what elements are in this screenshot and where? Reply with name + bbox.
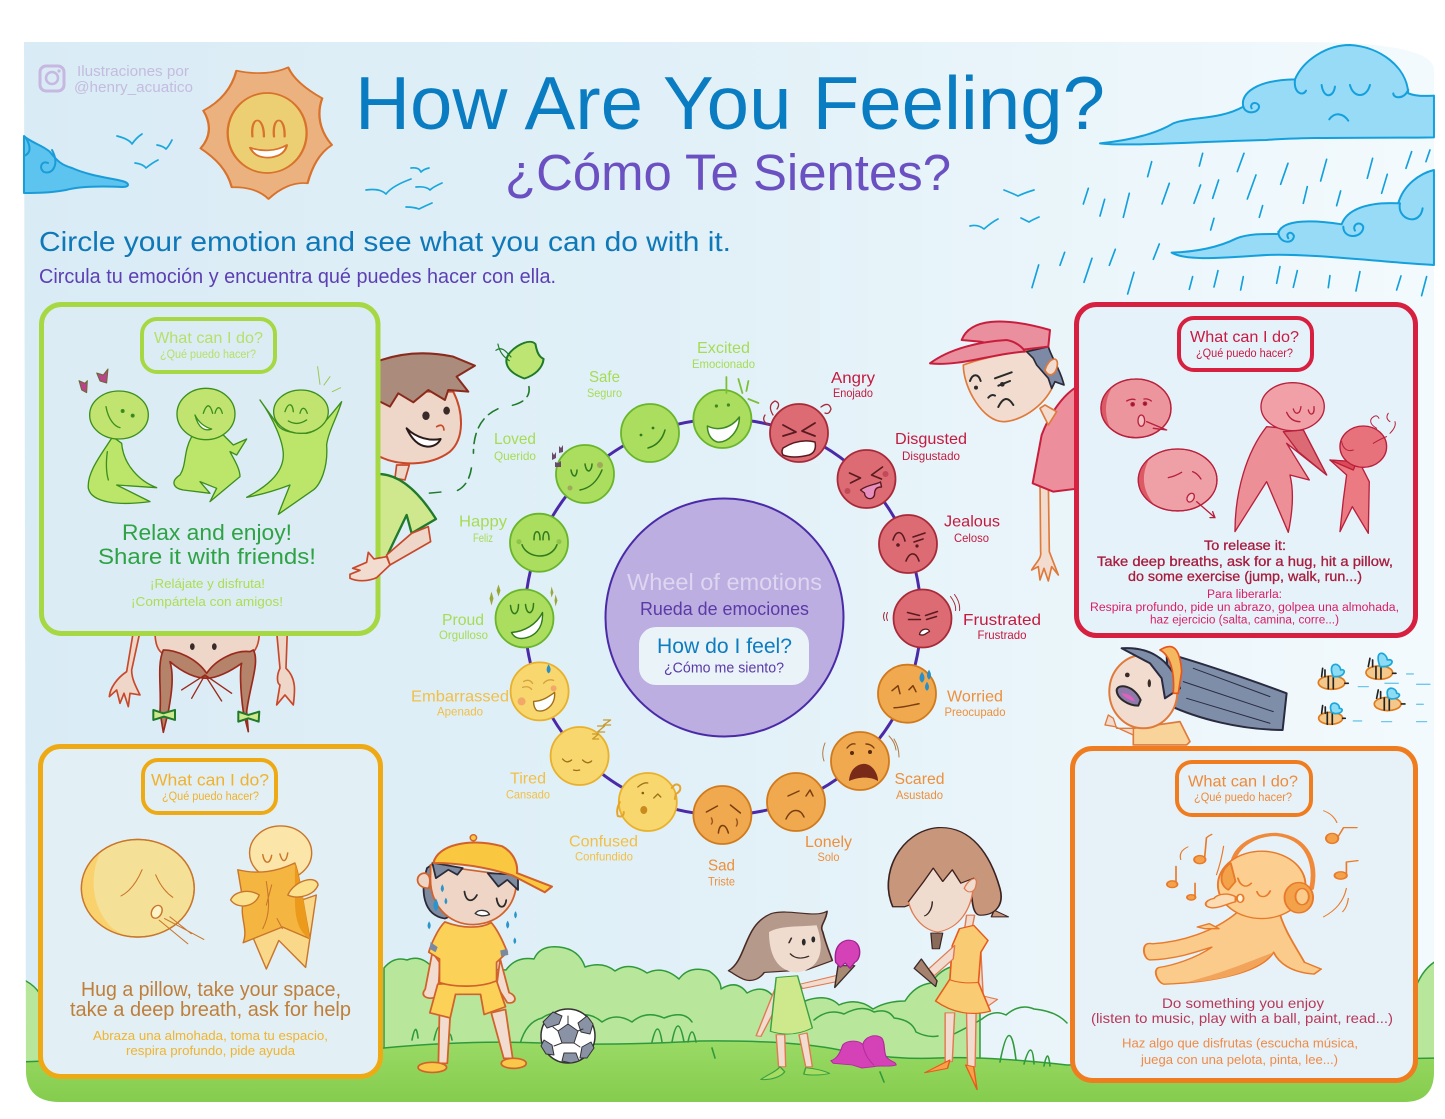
character: upside-down girl under green panel [109, 632, 295, 732]
panel: green what can I do: ¡Relájate y disfruta! [150, 576, 265, 591]
character: crying boy with yellow cap [418, 835, 552, 1072]
wheel ring [525, 419, 921, 815]
birds [117, 134, 1039, 229]
panel: red what can I do: To release it: [1204, 538, 1286, 553]
button: what can I do: ¿Qué puedo hacer? [160, 349, 256, 361]
character: grumpy boy with red cap [930, 322, 1080, 581]
emotion label: Happy: Feliz [473, 531, 493, 545]
emotion label: Worried: Preocupado [944, 705, 1006, 719]
panel: yellow what can I do: respira profundo, pide ayuda [126, 1043, 296, 1058]
cloud lower right [1172, 170, 1434, 265]
wheel centre: Wheel of emotions [627, 569, 822, 595]
button: what can I do: ¿Qué puedo hacer? [1194, 792, 1292, 804]
emotion face: Disgusted [838, 450, 896, 508]
emotion label: Angry [831, 370, 875, 400]
instagram credit: Ilustraciones por [77, 63, 189, 80]
emotion label: Proud: Proud [442, 612, 484, 629]
character: girl with ice cream [729, 911, 860, 1080]
pill: how do I feel [639, 627, 809, 685]
emotion label: Excited: Excited [697, 340, 750, 357]
emotion label: Worried [944, 688, 1006, 719]
emotion label: Loved [494, 431, 536, 463]
character: screaming girl with blowing hair [1105, 647, 1287, 745]
emotion label: Happy: Happy [459, 514, 507, 530]
icon: butterfly and dashed flight path [429, 342, 544, 493]
panel: orange what can I do: (listen to music, play with a ball, paint, read...) [1091, 1010, 1393, 1026]
button: what can I do [143, 760, 276, 813]
emotion label: Safe: Seguro [587, 386, 622, 400]
icon: smiling sun [201, 67, 332, 199]
emotion label: Tired [506, 770, 550, 802]
emotion face: Excited [693, 377, 758, 448]
panel: green what can I do [42, 304, 378, 634]
meadow: bushes and grass [20, 947, 1440, 1110]
illustration: deep breaths and hug [1087, 375, 1395, 533]
cloud left [24, 136, 128, 193]
panel: red what can I do: Respira profundo, pide un abrazo, golpea una almohada, [1090, 602, 1399, 614]
emotion label: Angry: Enojado [833, 386, 873, 400]
button: what can I do: ¿Qué puedo hacer? [162, 791, 259, 803]
emotion label: Lonely: Lonely [805, 834, 852, 851]
emotion face: Happy [510, 514, 568, 572]
emotion label: Proud [439, 612, 488, 642]
title: How Are You Feeling? [355, 61, 1105, 145]
emotion label: Confused: Confused [569, 834, 638, 850]
emotion face: Scared [823, 732, 899, 790]
icon: soccer ball [541, 1009, 595, 1063]
emotion face: Loved [552, 445, 614, 503]
emotion label: Frustrated [963, 612, 1041, 642]
emotion label: Proud: Orgulloso [439, 628, 488, 642]
button: what can I do: What can I do? [1190, 329, 1299, 346]
icon: bees [1318, 653, 1430, 724]
emotion label: Happy [459, 514, 507, 545]
emotion label: Jealous [944, 514, 1000, 545]
wheel centre: Rueda de emociones [640, 599, 809, 619]
panel: red what can I do: Take deep breaths, ask for a hug, hit a pillow, [1097, 554, 1393, 569]
emotion face: Jealous [879, 515, 937, 573]
cloud top right with sad face [1100, 45, 1434, 144]
rain [1032, 150, 1430, 296]
emotion face: Sad [693, 786, 751, 844]
emotion label: Loved: Loved [494, 431, 536, 448]
emotion face: Safe [621, 404, 679, 462]
button: what can I do: ¿Qué puedo hacer? [1196, 348, 1293, 360]
emotion label: Sad: Sad [708, 858, 735, 874]
emotion label: Jealous: Celoso [954, 531, 989, 545]
emotion label: Excited: Emocionado [692, 357, 755, 371]
emotion label: Sad [708, 858, 735, 888]
emotion label: Scared [894, 771, 944, 802]
pill: how do I feel: How do I feel? [657, 635, 792, 658]
button: what can I do [142, 319, 275, 372]
panel: red what can I do: do some exercise (jump, walk, run...) [1128, 569, 1362, 584]
emotion label: Scared: Asustado [896, 788, 943, 802]
emotion face: Proud [490, 584, 558, 648]
button: what can I do: What can I do? [1188, 774, 1298, 790]
pill: how do I feel: ¿Cómo me siento? [664, 660, 784, 676]
emotion label: Embarrassed [411, 688, 509, 718]
emotion label: Excited [692, 340, 755, 371]
emotion label: Worried: Worried [947, 688, 1003, 706]
button: what can I do: What can I do? [154, 330, 263, 347]
panel: green what can I do: Share it with friends! [98, 544, 316, 569]
emotion label: Lonely [805, 834, 852, 864]
panel: orange what can I do: Do something you enjoy [1162, 995, 1324, 1011]
emotion face: Frustrated [884, 590, 960, 648]
character: girl looking at phone [888, 828, 1008, 1090]
illustration: three happy figures [79, 367, 342, 514]
panel: orange what can I do: Haz algo que disfrutas (escucha música, [1122, 1036, 1358, 1050]
emotion label: Tired: Cansado [506, 788, 550, 802]
instruction spanish: Circula tu emoción y encuentra qué puedes hacer con ella. [39, 266, 556, 288]
emotion label: Confused [569, 834, 638, 864]
panel: yellow what can I do [40, 746, 380, 1076]
emotion label: Disgusted: Disgusted [895, 431, 967, 448]
panel: red what can I do: haz ejercicio (salta, camina, corre...) [1150, 614, 1339, 626]
illustration: relaxing with headphones [1144, 811, 1358, 984]
button: what can I do [1179, 318, 1312, 370]
instagram credit: @henry_acuatico [74, 79, 193, 96]
emotion label: Frustrated: Frustrated [963, 612, 1041, 629]
button: what can I do [1177, 762, 1311, 815]
illustration: deep breath and pillow hug [81, 826, 318, 969]
emotion face: Embarrassed [511, 662, 569, 720]
emotion face: Tired [551, 720, 611, 785]
emotion label: Tired: Tired [510, 770, 546, 788]
panel: yellow what can I do: take a deep breath, ask for help [70, 999, 351, 1021]
panel: yellow what can I do: Hug a pillow, take your space, [81, 979, 341, 1001]
emotion label: Confused: Confundido [575, 850, 633, 864]
emotion label: Loved: Querido [494, 449, 536, 463]
emotion label: Jealous: Jealous [944, 514, 1000, 530]
emotion label: Angry: Angry [831, 370, 875, 387]
panel: orange what can I do: juega con una pelota, pinta, lee...) [1140, 1052, 1338, 1067]
character: smiling boy behind green panel [377, 353, 475, 565]
boy's hand over green panel [350, 552, 390, 581]
emotion label: Safe [587, 369, 622, 400]
emotion label: Frustrated: Frustrado [978, 628, 1027, 642]
panel: green what can I do: Relax and enjoy! [122, 520, 292, 545]
instruction english: Circle your emotion and see what you can do with it. [39, 226, 731, 257]
button: what can I do: What can I do? [151, 770, 269, 790]
panel: red what can I do [1076, 304, 1416, 636]
instagram credit [40, 63, 193, 96]
panel: green what can I do: ¡Compártela con amigos! [131, 594, 283, 609]
panel: orange what can I do [1072, 748, 1416, 1080]
emotion label: Disgusted: Disgustado [902, 449, 960, 463]
subtitle: ¿Cómo Te Sientes? [505, 144, 951, 201]
emotion label: Embarrassed: Apenado [437, 704, 483, 718]
emotion face: Confused [617, 773, 680, 831]
emotion face: Lonely [767, 773, 825, 831]
emotion label: Scared: Scared [894, 771, 944, 788]
emotion label: Lonely: Solo [818, 850, 840, 864]
emotion face: Angry [764, 401, 831, 462]
panel: red what can I do: Para liberarla: [1207, 589, 1282, 601]
wheel centre [606, 498, 844, 736]
panel: yellow what can I do: Abraza una almohada, toma tu espacio, [93, 1028, 328, 1043]
emotion label: Embarrassed: Embarrassed [411, 688, 509, 706]
emotion label: Sad: Triste [708, 874, 735, 888]
emotion face: Worried [878, 665, 936, 723]
emotion label: Safe: Safe [589, 369, 620, 386]
emotion label: Disgusted [895, 431, 967, 463]
icon: melted ice cream [831, 1036, 896, 1068]
